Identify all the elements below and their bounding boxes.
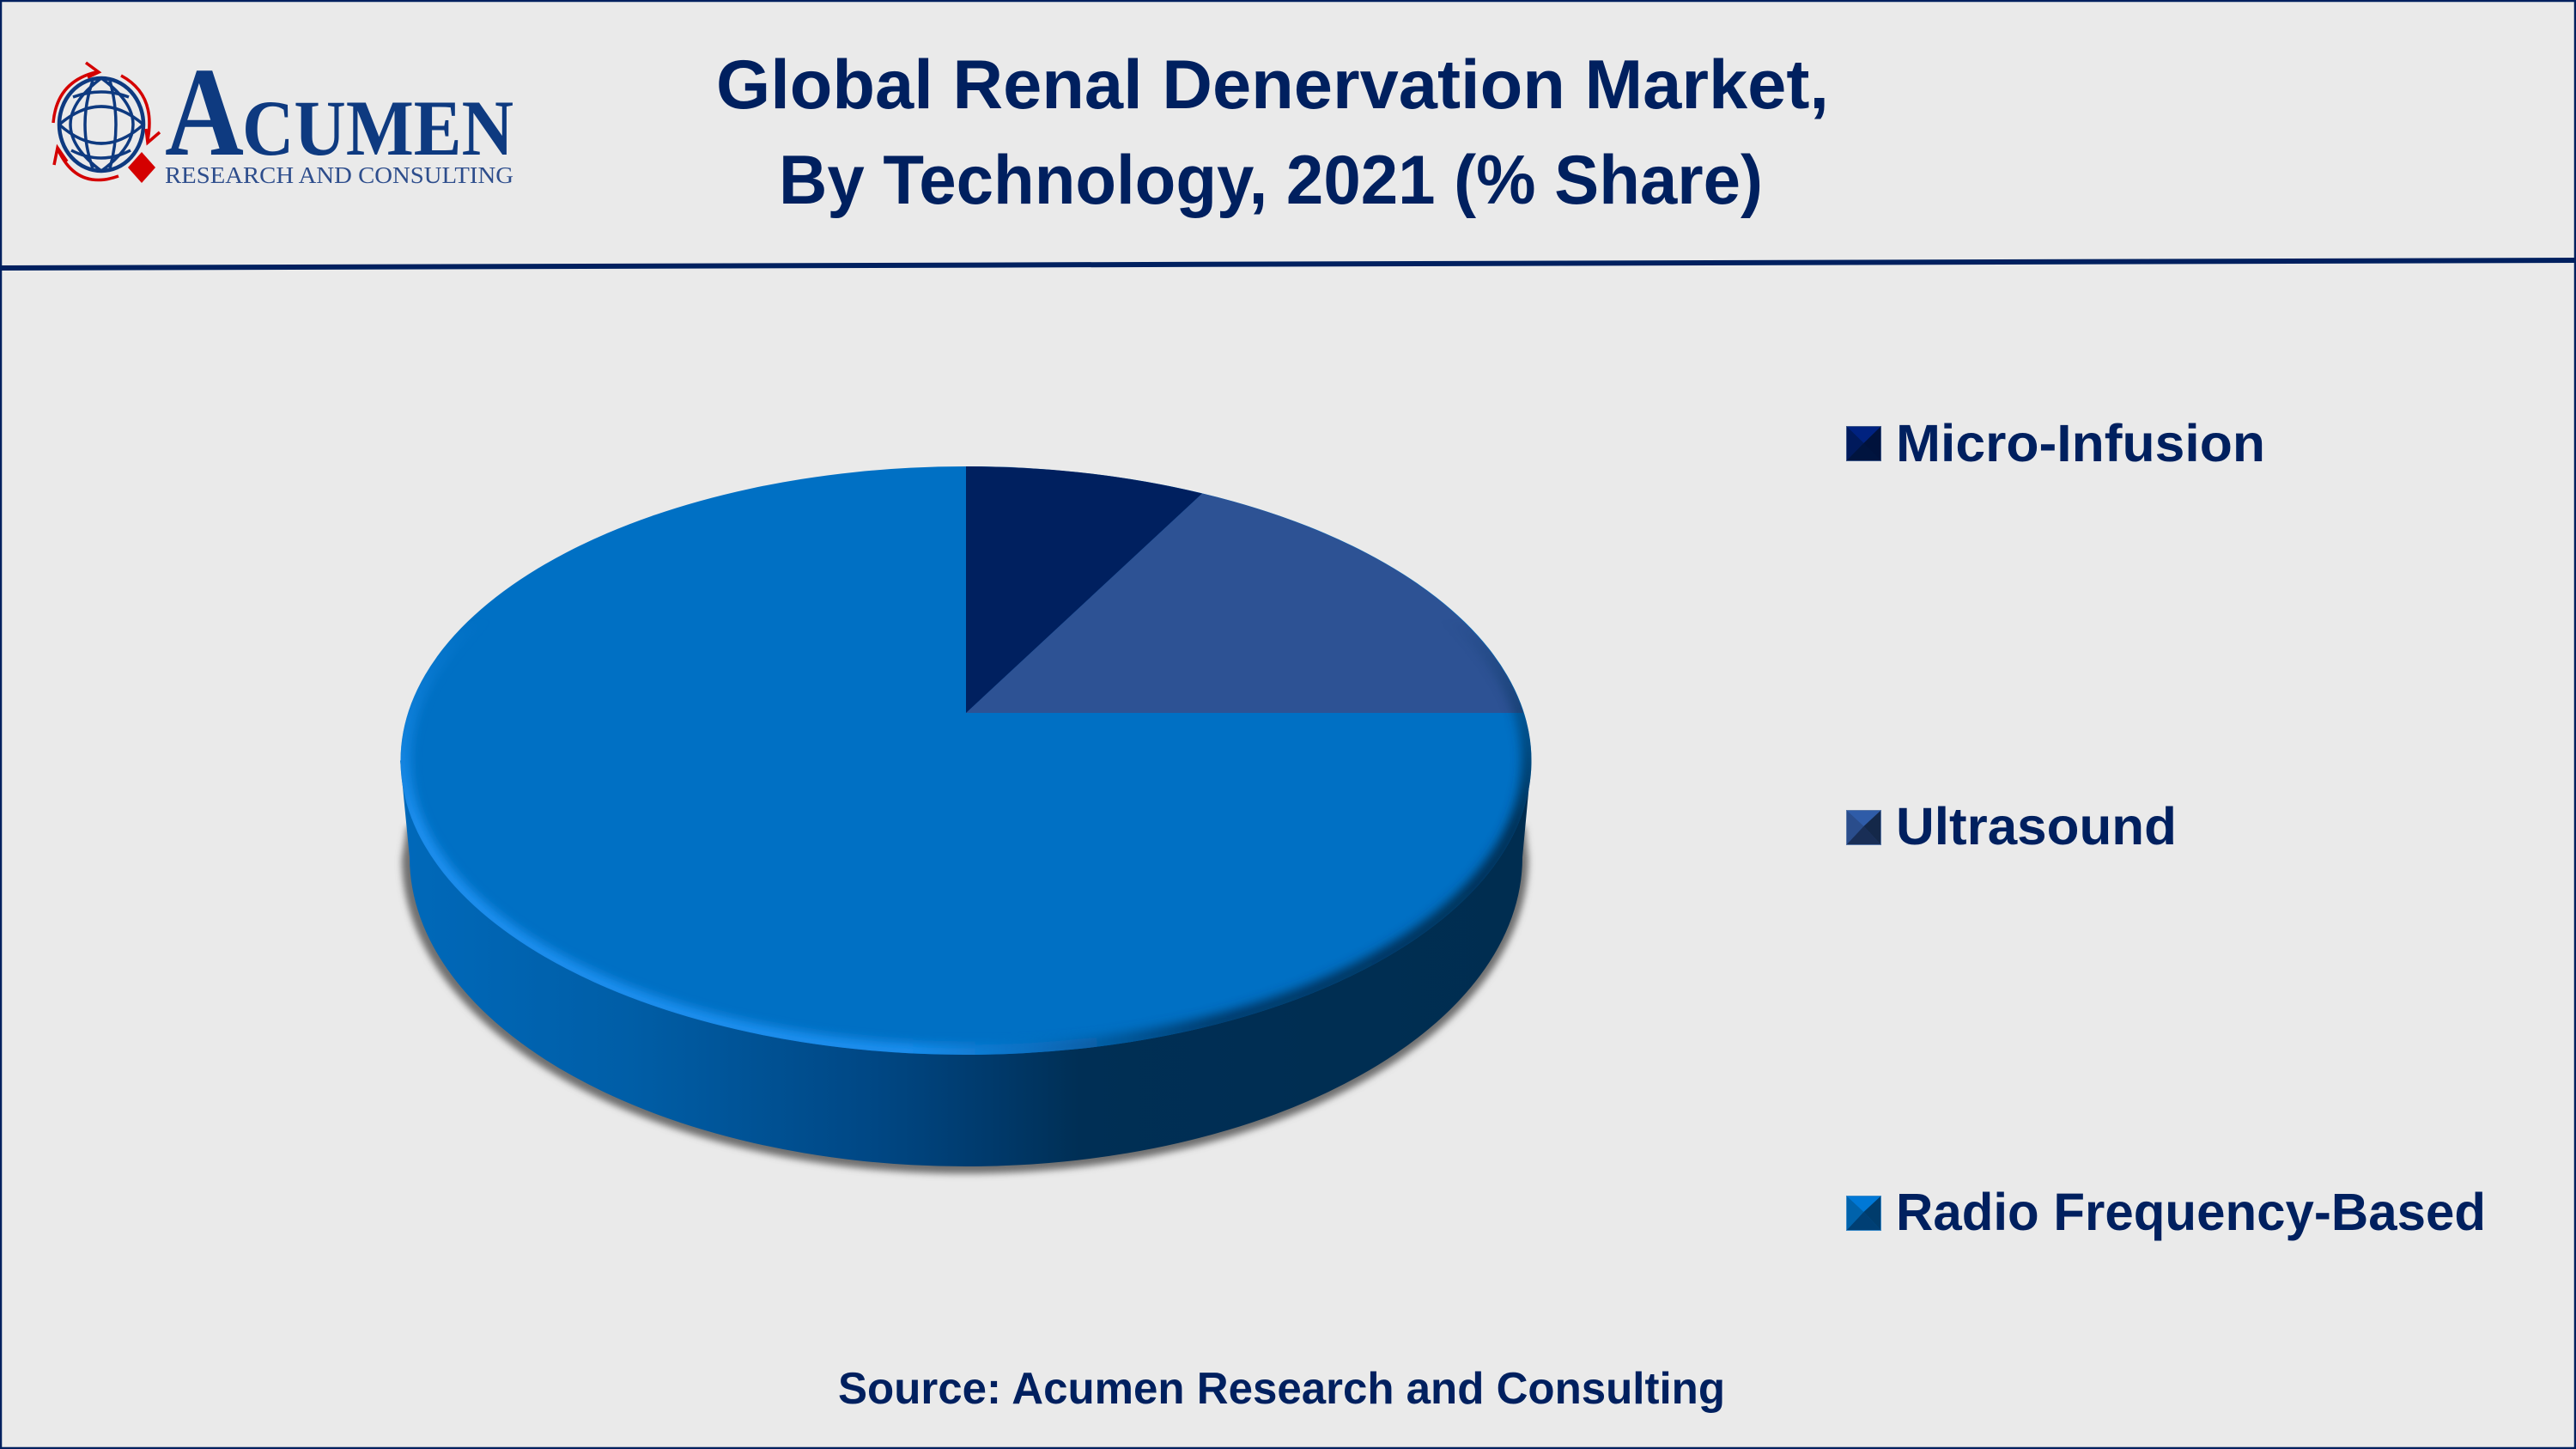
pie drop shadow <box>402 826 1528 1173</box>
legend item: Radio Frequency-Based <box>1846 1183 2486 1242</box>
swatch: Radio Frequency-Based <box>1846 1196 1881 1231</box>
logo wordmark: A <box>165 42 244 183</box>
pie side wall <box>400 761 1532 1166</box>
legend <box>1846 414 2486 1242</box>
logo wordmark remainder: CUMEN <box>242 84 513 172</box>
legend item: Ultrasound <box>1846 797 2177 856</box>
logo: Acumen Research and Consulting <box>53 42 513 188</box>
icon: red diamond <box>128 152 155 183</box>
label: Ultrasound: Ultrasound <box>1896 797 2177 856</box>
slice: Ultrasound <box>966 493 1523 713</box>
slice: Radio Frequency-Based <box>400 466 1532 1055</box>
icon: red circular arrows <box>53 63 160 180</box>
title <box>716 46 1829 219</box>
legend item: Micro-Infusion <box>1846 414 2265 473</box>
source note: Source: Acumen Research and Consulting <box>838 1364 1725 1414</box>
icon: globe <box>59 78 143 171</box>
swatch: Micro-Infusion <box>1846 426 1881 461</box>
slice: Micro-Infusion <box>966 466 1202 713</box>
title line 2: By Technology, 2021 (% Share) <box>779 142 1763 219</box>
pie bevel rim <box>400 636 1532 1055</box>
logo tagline: RESEARCH AND CONSULTING <box>165 162 513 188</box>
label: Micro-Infusion: Micro-Infusion <box>1896 414 2265 473</box>
label: Radio Frequency-Based: Radio Frequency-Based <box>1896 1183 2486 1242</box>
swatch: Ultrasound <box>1846 810 1881 845</box>
header divider line <box>0 258 2576 271</box>
3D pie chart <box>400 466 1532 1173</box>
title line 1: Global Renal Denervation Market, <box>716 46 1829 124</box>
